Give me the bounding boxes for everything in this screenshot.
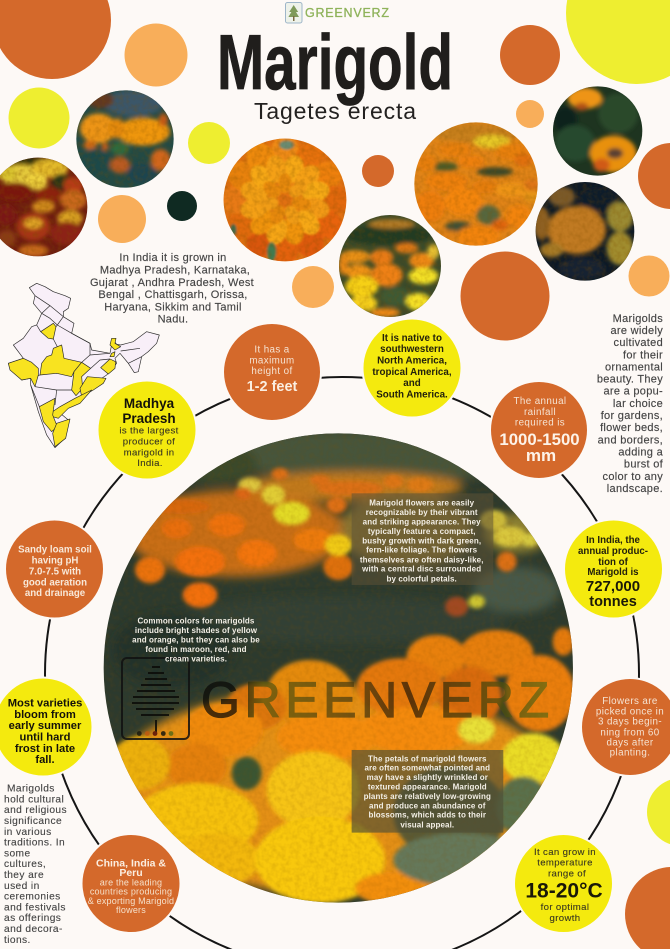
ring connecting fact circles xyxy=(45,377,639,949)
text: cultural significance: tions. xyxy=(4,935,31,946)
text: where grown in India: Nadu. xyxy=(158,314,188,326)
photo caption: appearance: bushy growth with dark green, xyxy=(362,536,481,545)
photo: single marigold close-up xyxy=(221,136,349,264)
photo caption: appearance: recognizable by their vibrant xyxy=(366,508,478,517)
fact: soil: Sandy loam soil xyxy=(18,544,92,556)
fact: soil: good aeration xyxy=(23,578,87,588)
text: ornamental beauty: flower beds, xyxy=(600,422,663,434)
text: cultural significance: and decora- xyxy=(4,924,63,935)
photo caption: petals: may have a slightly wrinkled or xyxy=(367,773,488,782)
text: where grown in India: Gujarat , Andhra Pradesh, West xyxy=(90,277,254,289)
text: where grown in India: Bengal , Chattisgarh, Orissa, xyxy=(98,289,248,301)
photo caption: colours: found in maroon, red, and xyxy=(145,645,247,654)
photo caption: colours: Common colors for marigolds xyxy=(138,617,255,626)
fact: rainfall: rainfall xyxy=(524,407,556,418)
photo: orange marigolds on blue-green xyxy=(75,89,175,189)
fact: leading producers xyxy=(82,834,180,933)
fact: annual production xyxy=(564,520,663,618)
fact: Madhya Pradesh: marigold in xyxy=(124,448,174,458)
fact: native range: tropical America, xyxy=(372,367,452,378)
photo caption: appearance: themselves are often daisy-like, xyxy=(360,555,484,564)
fact: rainfall: 1000-1500 xyxy=(499,430,580,449)
photo caption: petals: visual appeal. xyxy=(400,820,454,829)
fact: temperature: It can grow in xyxy=(534,847,596,858)
fact: native range: It is native to xyxy=(382,333,442,344)
text: ornamental beauty: landscape. xyxy=(607,483,663,495)
fact: height xyxy=(223,323,321,421)
fact: Madhya Pradesh: Madhya xyxy=(124,396,175,411)
fact: leading producers: are the leading xyxy=(100,878,162,888)
text: cultural significance: significance xyxy=(4,816,62,827)
fact: annual production: tion of xyxy=(598,557,629,568)
text: cultural significance: ceremonies xyxy=(4,892,61,903)
text: cultural significance: in various xyxy=(4,827,52,838)
text: ornamental beauty: cultivated xyxy=(614,337,663,349)
text: ornamental beauty: ornamental xyxy=(605,361,663,373)
text: ornamental beauty: Marigolds xyxy=(613,313,663,325)
fact: rainfall xyxy=(490,381,588,479)
photo caption: appearance xyxy=(360,499,484,583)
text: cultural significance: and festivals xyxy=(4,902,66,913)
fact: temperature xyxy=(514,834,613,933)
text: cultural significance: as offerings xyxy=(4,913,61,924)
text: cultural significance: and religious xyxy=(4,805,67,816)
fact: soil: 7.0-7.5 with xyxy=(29,566,81,578)
fact: height: maximum xyxy=(249,356,295,366)
photo caption: appearance: by colorful petals. xyxy=(387,574,457,583)
photo caption: petals: are often somewhat pointed and xyxy=(364,764,490,773)
photo caption: appearance: with a central disc surrounded xyxy=(361,565,481,574)
text: ornamental beauty xyxy=(597,313,664,495)
photo caption: petals: and produce an abundance of xyxy=(369,801,486,810)
caption box: petals xyxy=(352,750,503,833)
text: ornamental beauty: are widely xyxy=(610,325,663,337)
photo caption: appearance: Marigold flowers are easily xyxy=(369,499,475,508)
fact: native range: South America. xyxy=(376,389,448,400)
fact: annual production: annual produc- xyxy=(578,546,648,557)
photo caption: petals: The petals of marigold flowers xyxy=(368,754,487,763)
fact: height: height of xyxy=(251,366,293,377)
fact: bloom season xyxy=(0,678,92,776)
fact: temperature: range of xyxy=(548,868,586,879)
photo caption: colours: cream varieties. xyxy=(165,654,227,663)
text: ornamental beauty: adding a xyxy=(618,446,664,458)
text: where grown in India: In India it is grown in xyxy=(119,252,227,264)
fact: rainfall: The annual xyxy=(513,396,567,407)
watermark xyxy=(122,658,549,739)
fact: Madhya Pradesh: is the largest xyxy=(119,426,179,436)
photo caption: petals xyxy=(364,754,491,829)
photo: orange and yellow rows xyxy=(338,215,442,318)
fact: native range xyxy=(362,318,462,418)
subtitle: Tagetes erecta xyxy=(254,98,416,124)
photo caption: colours: and orange, but they can also be xyxy=(132,636,260,645)
fact: picking: days after xyxy=(606,737,654,748)
fact: leading producers: countries producing xyxy=(90,886,172,896)
text: cultural significance: Marigolds xyxy=(7,784,55,795)
fact: leading producers: China, India & xyxy=(96,858,166,870)
fact: picking xyxy=(581,678,670,776)
fact: bloom season: fall. xyxy=(35,754,55,766)
fact: picking: planting. xyxy=(610,748,650,759)
photo caption: colours: include bright shades of yellow xyxy=(135,626,258,635)
text: ornamental beauty: are a popu- xyxy=(603,386,663,398)
fact: temperature: 18-20°C xyxy=(525,880,603,902)
text: where grown in India xyxy=(90,252,254,326)
photo caption: appearance: typically feature a compact, xyxy=(368,527,476,536)
text: where grown in India: Haryana, Sikkim and Tamil xyxy=(104,302,242,314)
fact: Madhya Pradesh: producer of xyxy=(123,436,175,448)
text: cultural significance xyxy=(4,784,67,946)
text: ornamental beauty: color to any xyxy=(603,471,663,483)
fact: rainfall: required is xyxy=(515,418,565,429)
text: cultural significance: used in xyxy=(4,881,40,892)
text: where grown in India: Madhya Pradesh, Karnataka, xyxy=(100,264,250,276)
text: ornamental beauty: beauty. They xyxy=(597,374,663,386)
fact: temperature: growth xyxy=(550,913,580,924)
logo: Greenverz xyxy=(286,2,389,23)
text: cultural significance: hold cultural xyxy=(4,794,64,805)
fact: height: It has a xyxy=(254,344,290,356)
fact: bloom season: frost in late xyxy=(15,743,75,755)
fact: picking: picked once in xyxy=(596,706,664,717)
text: cultural significance: cultures, xyxy=(4,859,46,870)
fact: annual production: In India, the xyxy=(586,535,641,546)
fact: picking: Flowers are xyxy=(602,696,658,707)
fact: leading producers: flowers xyxy=(116,905,146,915)
photo: marigold with bee xyxy=(552,85,645,177)
text: ornamental beauty: lar choice xyxy=(613,398,663,410)
fact: bloom season: early summer xyxy=(9,720,82,732)
photo caption: colours xyxy=(132,617,260,663)
title: Marigold xyxy=(217,18,453,106)
fact: bloom season: Most varieties xyxy=(8,698,82,710)
photo caption: petals: blossoms, which adds to their xyxy=(369,811,486,820)
text: cultural significance: traditions. In xyxy=(4,838,65,849)
fact: picking: ning from 60 xyxy=(600,727,660,738)
photo caption: petals: plants are relatively low-growing xyxy=(364,792,491,801)
fact: soil: having pH xyxy=(32,556,78,566)
fact: annual production: tonnes xyxy=(589,594,637,610)
photo caption: petals: textured appearance. Marigold xyxy=(368,782,487,791)
fact: soil xyxy=(5,520,104,618)
fact: soil: and drainage xyxy=(25,588,86,599)
text: ornamental beauty: burst of xyxy=(624,459,664,471)
fact: native range: southwestern xyxy=(380,344,444,355)
watermark: GREENVERZ xyxy=(201,672,549,728)
fact: picking: 3 days begin- xyxy=(598,717,662,728)
fact: Madhya Pradesh: Pradesh xyxy=(122,411,176,426)
text: cultural significance: some xyxy=(4,848,31,859)
fact: annual production: Marigold is xyxy=(587,567,639,578)
photo: dark maroon-orange bloom xyxy=(533,180,637,283)
text: ornamental beauty: and borders, xyxy=(598,434,663,446)
text: ornamental beauty: for gardens, xyxy=(601,410,663,422)
map: India with producer states highlighted xyxy=(8,283,159,448)
fact: height: 1-2 feet xyxy=(247,379,298,395)
fact: temperature: for optimal xyxy=(541,902,589,913)
fact: rainfall: mm xyxy=(526,446,556,465)
fact: native range: North America, xyxy=(377,355,447,366)
fact: temperature: temperature xyxy=(537,857,593,868)
fact: Madhya Pradesh xyxy=(98,380,196,480)
fact: leading producers: & exporting Marigold xyxy=(88,896,174,906)
fact: bloom season: until hard xyxy=(20,732,71,744)
fact: leading producers: Peru xyxy=(119,867,143,879)
fact: native range: and xyxy=(403,378,421,389)
photo: field of orange marigolds xyxy=(413,122,540,247)
fact: annual production: 727,000 xyxy=(586,578,640,595)
main photo: marigold field with watermark xyxy=(100,430,580,910)
fact: Madhya Pradesh: India. xyxy=(137,458,163,469)
photo: red and yellow marigolds xyxy=(0,157,90,260)
fact: bloom season: bloom from xyxy=(14,709,76,721)
photo caption: appearance: fern-like foliage. The flowers xyxy=(366,546,478,555)
text: cultural significance: they are xyxy=(4,870,44,881)
logo: Greenverz: GREENVERZ xyxy=(305,6,389,20)
text: ornamental beauty: for their xyxy=(623,349,663,361)
caption box: appearance xyxy=(352,493,493,585)
photo caption: appearance: and striking appearance. They xyxy=(363,518,481,527)
